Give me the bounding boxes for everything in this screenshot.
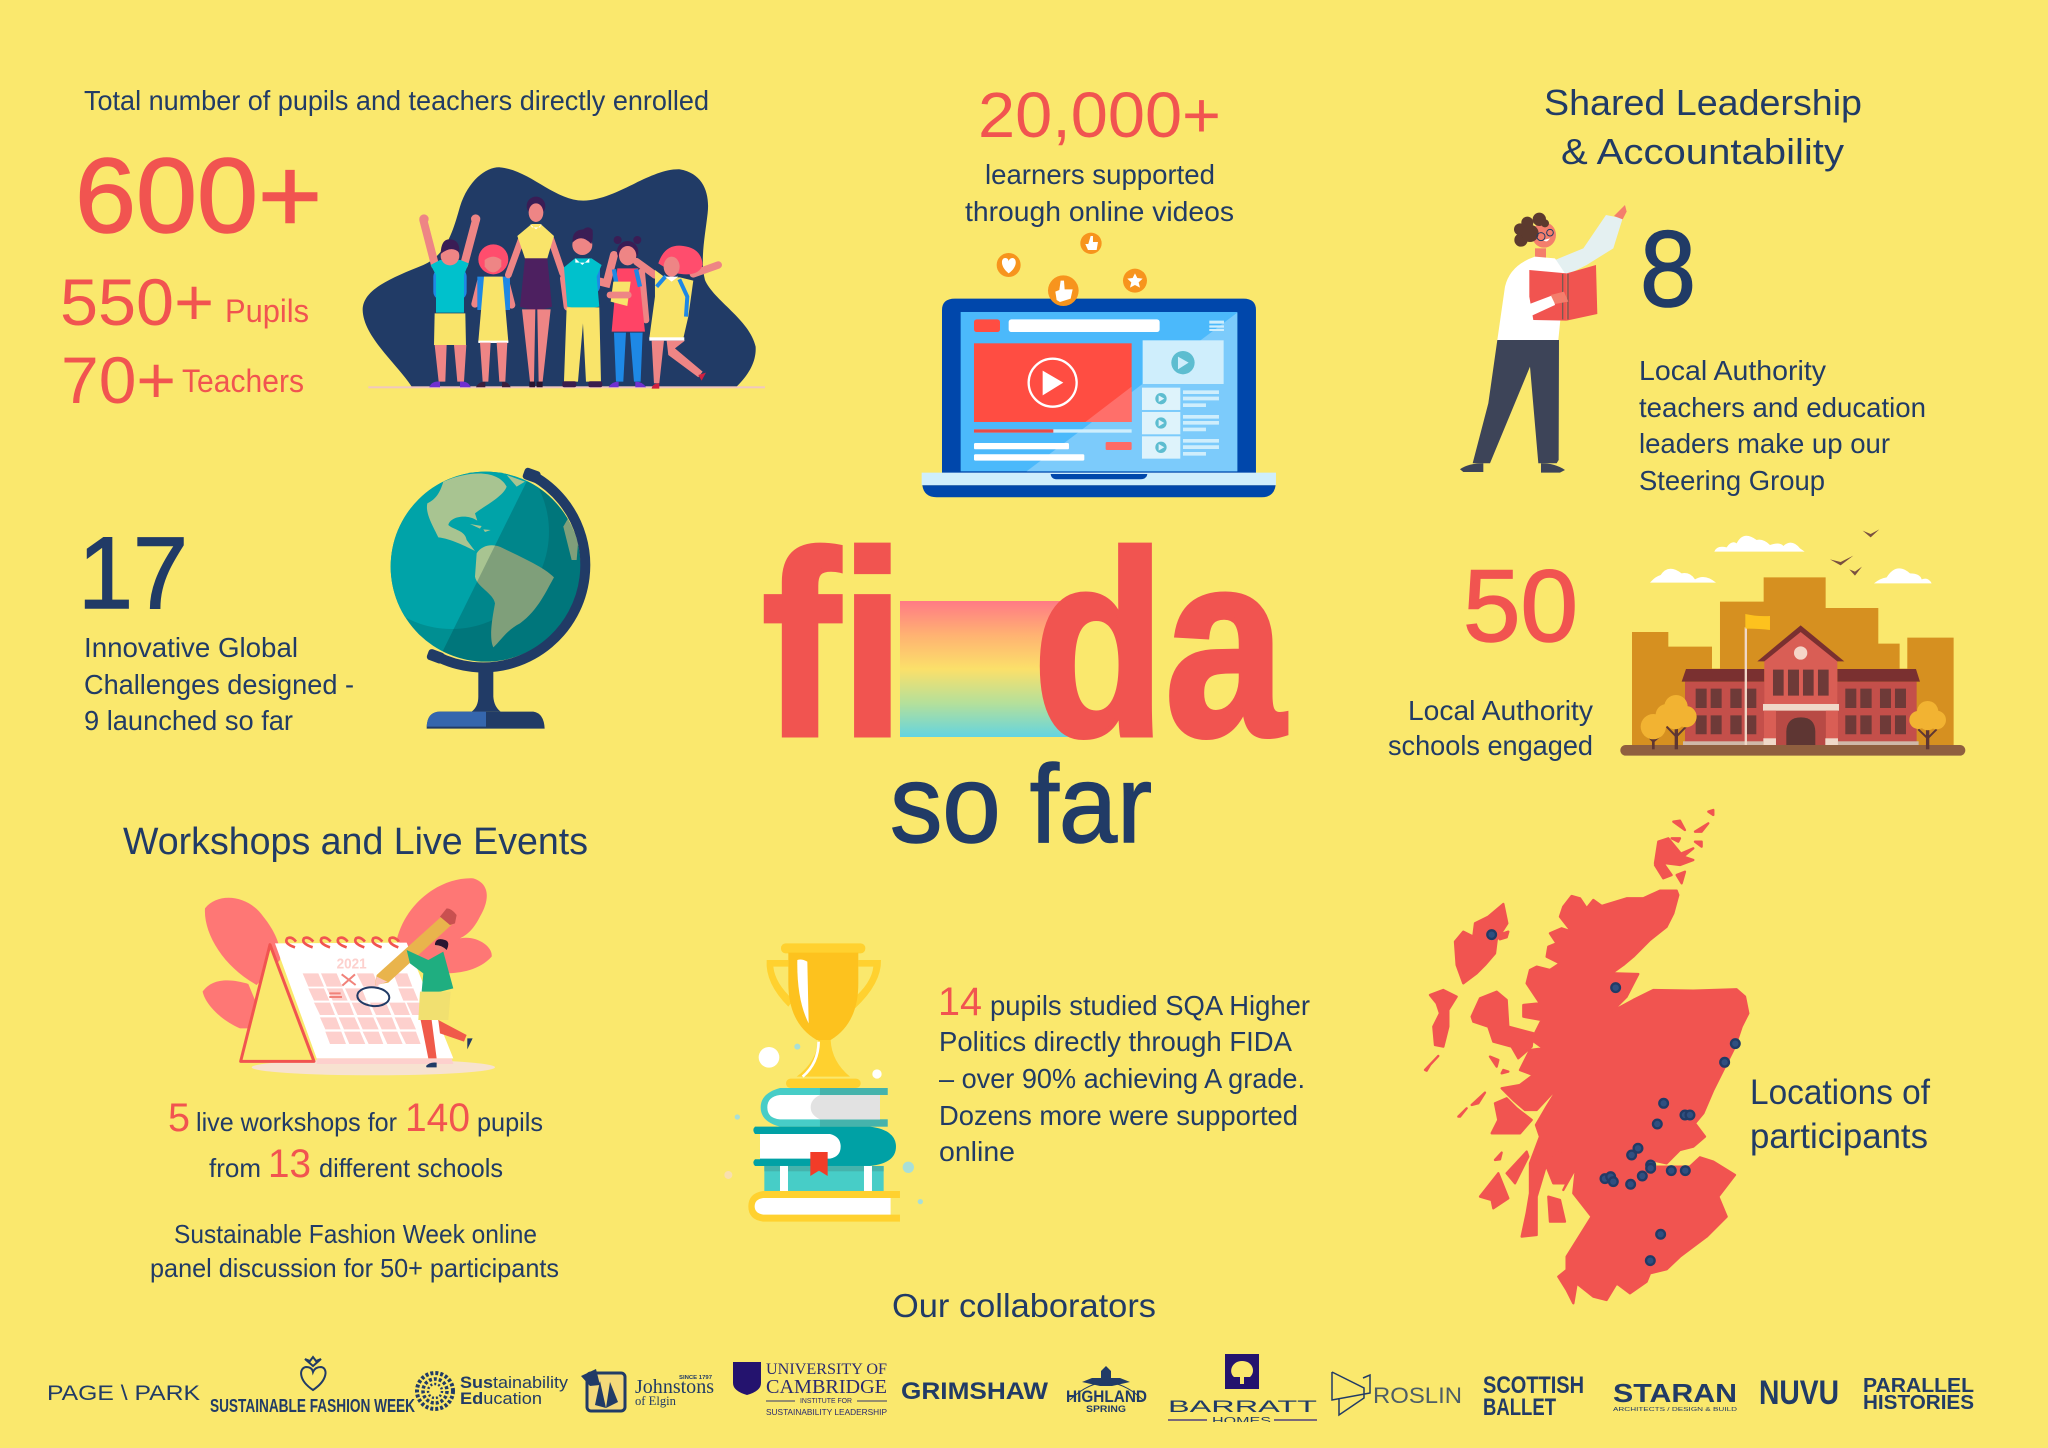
- map: Scotland with participant locations: [1425, 810, 1748, 1303]
- logo: Page Park: PAGE \ PARK: [47, 1382, 200, 1405]
- text: SQA higher results: Politics directly through FIDA: [939, 1026, 1292, 1057]
- text: SQA higher results: 14: [938, 980, 982, 1024]
- stat: 70+ teachers: Teachers: [182, 363, 304, 399]
- text: live workshops: from: [209, 1153, 261, 1183]
- panel: locations map: [1425, 810, 1930, 1303]
- text: innovative global challenges: Challenges designed -: [84, 669, 354, 700]
- collaborator logos: [47, 1354, 1974, 1427]
- location markers: [1487, 930, 1740, 1265]
- panel: workshops and live events: [123, 821, 588, 1283]
- central logo: fida so far: [762, 498, 1286, 866]
- stat: 550+ pupils: 550+: [60, 265, 214, 339]
- logo: Scottish Ballet: [1483, 1372, 1584, 1421]
- panel: online videos: [922, 79, 1276, 497]
- logo: Scottish Ballet: BALLET: [1483, 1394, 1556, 1421]
- panel: SQA higher politics: [724, 943, 1310, 1222]
- heading: shared leadership: [1544, 82, 1862, 172]
- icon: reaction badges: [997, 233, 1147, 306]
- illustration: globe: [390, 468, 590, 729]
- logo: Sustainable Fashion Week: [210, 1357, 415, 1416]
- panel: shared leadership and accountability: [1460, 82, 1926, 496]
- illustration: trophy on books: [724, 943, 923, 1222]
- logo: Barratt Homes: [1168, 1354, 1317, 1427]
- logo: Barratt Homes: BARRATT: [1168, 1397, 1317, 1416]
- text: live workshops: different schools: [319, 1153, 503, 1183]
- girl 3: [609, 236, 646, 387]
- text: fashion week panel: Sustainable Fashion Week online: [174, 1219, 537, 1249]
- logo: Sustainable Fashion Week: SUSTAINABLE FASHION WEEK: [210, 1396, 415, 1416]
- illustration: man reading book: [1460, 205, 1627, 473]
- text: SQA higher results: – over 90% achieving A grade.: [939, 1063, 1305, 1094]
- stat: 17: 17: [78, 516, 188, 630]
- text: locations of participants: Locations of: [1750, 1073, 1930, 1112]
- logo: Staran: ARCHITECTS / DESIGN & BUILD: [1613, 1407, 1737, 1413]
- text: learners supported: through online videos: [965, 196, 1234, 227]
- teacher: [508, 197, 563, 387]
- logo: Barratt Homes: HOMES: [1212, 1416, 1272, 1427]
- stat: 50: 50: [1463, 549, 1578, 663]
- logo: Parallel Histories: HISTORIES: [1863, 1392, 1974, 1414]
- text: learners supported: [965, 159, 1234, 227]
- text: SQA higher results: pupils studied SQA Higher: [990, 990, 1310, 1021]
- stat: 70+ teachers: [61, 343, 304, 417]
- logo text: da: da: [1033, 498, 1286, 791]
- logo: Parallel Histories: [1863, 1375, 1974, 1414]
- heading: total enrolled: Total number of pupils and teachers directly enrolled: [84, 85, 709, 116]
- text: schools engaged: [1388, 695, 1593, 761]
- illustration: calendar with character: 2021: [337, 956, 367, 972]
- heading: shared leadership: & Accountability: [1561, 131, 1844, 172]
- logo: Sustainability Education: Sustainability: [460, 1373, 569, 1392]
- logo: Parallel Histories: PARALLEL: [1863, 1375, 1974, 1397]
- panel: global challenges: [84, 468, 590, 730]
- text: locations of participants: participants: [1750, 1117, 1928, 1156]
- panel: local authority schools: [1388, 529, 1965, 761]
- text: fashion week panel: panel discussion for 50+ participants: [150, 1253, 559, 1283]
- text: SQA higher results: [938, 980, 1310, 1167]
- text: schools engaged: schools engaged: [1388, 730, 1593, 761]
- logo: Sustainability Education: Education: [460, 1389, 542, 1408]
- logo: Nuvu: NUVU: [1759, 1374, 1839, 1412]
- illustration: laptop with video player: [922, 233, 1276, 497]
- text: steering group: Steering Group: [1639, 465, 1825, 496]
- logo: Highland Spring: HIGHLAND: [1066, 1387, 1147, 1406]
- text: steering group: [1639, 355, 1926, 496]
- stat: 20,000+: 20,000+: [978, 79, 1221, 151]
- logo: University of Cambridge: [733, 1361, 887, 1417]
- illustration: pupils and teacher group: [363, 167, 765, 389]
- text: fashion week panel: [150, 1219, 559, 1283]
- text: steering group: leaders make up our: [1639, 428, 1890, 459]
- logo: Sustainability Education: [417, 1373, 569, 1409]
- logo: Scottish Ballet: SCOTTISH: [1483, 1372, 1584, 1399]
- logo: University of Cambridge: CAMBRIDGE: [766, 1376, 887, 1398]
- text: steering group: teachers and education: [1639, 392, 1926, 423]
- text: live workshops: 13: [268, 1142, 311, 1186]
- text: live workshops: [168, 1096, 543, 1186]
- stat: 550+ pupils: Pupils: [225, 293, 309, 329]
- logo: Johnstons of Elgin: SINCE 1797: [679, 1375, 712, 1381]
- text: SQA higher results: Dozens more were supported: [939, 1100, 1298, 1131]
- text: live workshops: live workshops for: [196, 1107, 397, 1137]
- text: live workshops: pupils: [477, 1107, 543, 1137]
- logo: University of Cambridge: SUSTAINABILITY LEADERSHIP: [766, 1407, 887, 1417]
- text: innovative global challenges: [84, 632, 354, 736]
- logo: Staran: STARAN: [1613, 1378, 1737, 1408]
- logo: Highland Spring: [1066, 1366, 1147, 1414]
- text: SQA higher results: online: [939, 1136, 1015, 1167]
- logo text: fi: fi: [762, 498, 905, 791]
- heading: our collaborators: Our collaborators: [892, 1287, 1156, 1324]
- text: learners supported: learners supported: [985, 159, 1215, 190]
- stat: 70+ teachers: 70+: [61, 343, 176, 417]
- stat: 550+ pupils: [60, 265, 309, 339]
- boy 1: [419, 214, 480, 387]
- logo: Johnstons of Elgin: Johnstons: [635, 1376, 714, 1398]
- heading: shared leadership: Shared Leadership: [1544, 82, 1862, 123]
- logo: Grimshaw: GRIMSHAW: [901, 1378, 1048, 1405]
- girl 4: [637, 246, 718, 389]
- text: innovative global challenges: 9 launched so far: [84, 705, 293, 736]
- stat: 8: 8: [1640, 208, 1696, 329]
- logo: Johnstons of Elgin: of Elgin: [635, 1393, 676, 1408]
- heading: workshops: Workshops and Live Events: [123, 821, 588, 863]
- gradient letter block: [900, 601, 1088, 737]
- stat: 600+: 600+: [75, 137, 322, 255]
- illustration: calendar with character: [203, 878, 495, 1075]
- boy 2: [562, 227, 614, 387]
- text: locations of participants: [1750, 1073, 1930, 1156]
- logo: University of Cambridge: UNIVERSITY OF: [766, 1361, 887, 1378]
- text: innovative global challenges: Innovative Global: [84, 632, 298, 663]
- text: schools engaged: Local Authority: [1408, 695, 1593, 726]
- girl 2: [475, 244, 512, 387]
- logo: Johnstons of Elgin: [581, 1369, 714, 1411]
- logo: University of Cambridge: INSTITUTE FOR: [800, 1398, 852, 1405]
- text: steering group: Local Authority: [1639, 355, 1826, 386]
- panel: pupils and teachers enrolled: [60, 85, 765, 417]
- logo: Highland Spring: SPRING: [1086, 1404, 1126, 1414]
- text: live workshops: 5: [168, 1096, 190, 1140]
- logo: Roslin: [1332, 1372, 1462, 1415]
- text: live workshops: 140: [405, 1096, 470, 1140]
- illustration: school building: [1620, 529, 1965, 756]
- logo: Roslin: ROSLIN: [1373, 1383, 1462, 1408]
- subtitle: so far: so far: [890, 743, 1152, 866]
